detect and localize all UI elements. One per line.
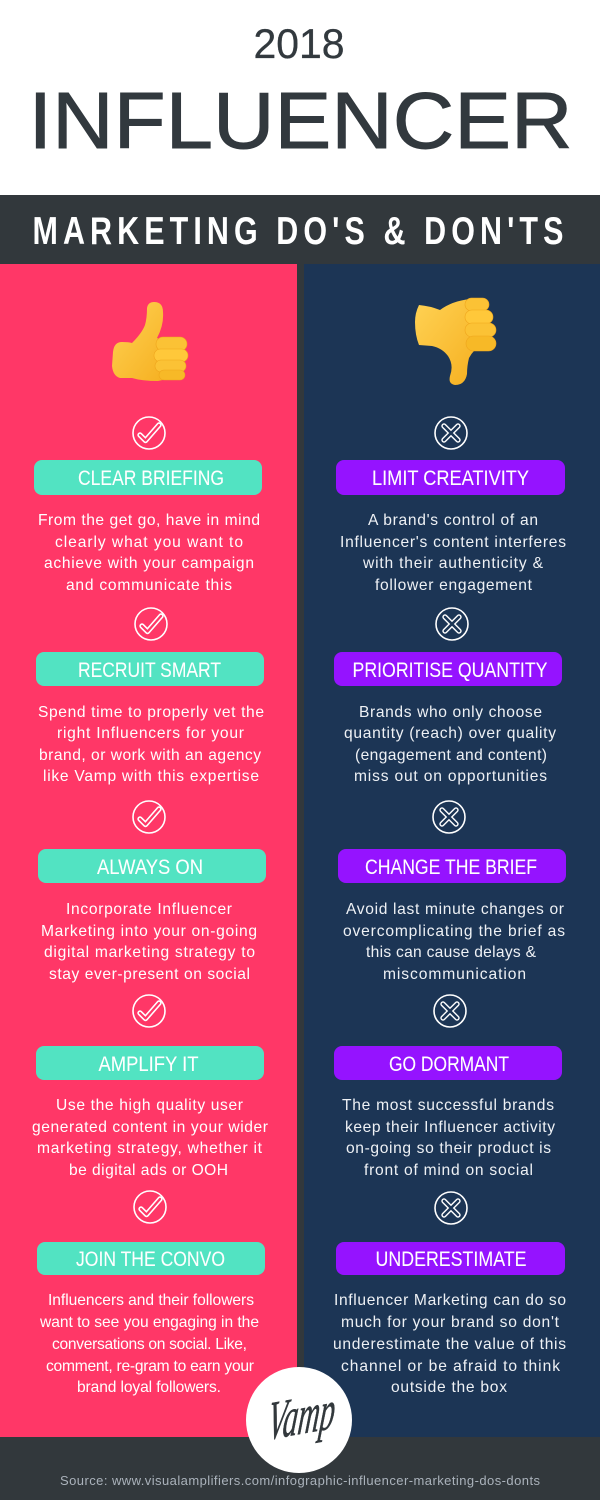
text block: underestimate: underestimate the value of this: [333, 1336, 566, 1353]
center gutter: [297, 264, 304, 1437]
badge: clear briefing: [34, 460, 262, 495]
text block: go dormant: keep their Influencer activity: [345, 1119, 555, 1136]
badge: amplify it: AMPLIFY IT: [98, 1053, 199, 1076]
icon: cross 3: [433, 801, 465, 833]
text block: change the brief: [343, 901, 565, 983]
badge: limit creativity: [336, 460, 565, 495]
panel: don'ts: [304, 264, 600, 1437]
text block: prioritise quantity: miss out on opportunities: [354, 768, 547, 785]
badge: go dormant: [334, 1046, 562, 1080]
text block: limit creativity: follower engagement: [375, 577, 533, 594]
text block: clear briefing: clearly what you want to: [55, 534, 243, 551]
text block: underestimate: outside the box: [391, 1379, 507, 1396]
text block: amplify it: generated content in your wider: [32, 1119, 268, 1136]
badge: clear briefing: CLEAR BRIEFING: [78, 467, 224, 490]
badge: recruit smart: RECRUIT SMART: [78, 659, 221, 682]
text block: underestimate: [333, 1292, 566, 1396]
text block: amplify it: Use the high quality user: [56, 1097, 243, 1114]
text block: underestimate: channel or be afraid to think: [341, 1358, 560, 1375]
title: INFLUENCER: INFLUENCER: [28, 76, 572, 165]
badge: change the brief: [338, 849, 566, 883]
icon: thumbs down: [415, 298, 496, 385]
text block: limit creativity: [340, 512, 566, 594]
title: 2018: 2018: [254, 20, 344, 67]
text block: join the convo: Influencers and their followers: [48, 1292, 254, 1309]
text block: go dormant: The most successful brands: [342, 1097, 554, 1114]
text block: always on: digital marketing strategy to: [44, 944, 255, 961]
logo: Vamp: Vamp: [265, 1378, 339, 1452]
text block: change the brief: miscommunication: [383, 966, 526, 983]
text block: change the brief: this can cause delays &: [366, 944, 537, 961]
text block: clear briefing: achieve with your campaign: [44, 555, 254, 572]
text block: recruit smart: Spend time to properly vet the: [38, 704, 264, 721]
header band: [0, 195, 600, 264]
text block: underestimate: much for your brand so don't: [341, 1314, 560, 1331]
text block: prioritise quantity: (engagement and content): [355, 747, 547, 764]
badge: always on: [38, 849, 266, 883]
text block: go dormant: on-going so their product is: [346, 1140, 551, 1157]
text block: amplify it: be digital ads or OOH: [69, 1162, 228, 1179]
text block: always on: [41, 901, 257, 983]
text block: recruit smart: right Influencers for your: [57, 725, 244, 742]
text block: prioritise quantity: quantity (reach) over quality: [344, 725, 556, 742]
text block: join the convo: [39, 1292, 259, 1396]
icon: cross 5: [435, 1192, 467, 1224]
text block: go dormant: [342, 1097, 555, 1179]
text block: amplify it: marketing strategy, whether it: [37, 1140, 263, 1157]
icon: check 2: [135, 608, 167, 640]
text block: clear briefing: and communicate this: [66, 577, 232, 594]
text block: always on: stay ever-present on social: [49, 966, 250, 983]
icon: cross 4: [434, 995, 466, 1027]
badge: recruit smart: [36, 652, 264, 686]
text block: amplify it: [32, 1097, 268, 1179]
panel: do's: [0, 264, 297, 1437]
icon: check 4: [133, 995, 165, 1027]
text block: limit creativity: with their authenticity &: [362, 555, 544, 572]
badge: join the convo: [37, 1242, 265, 1275]
badge: underestimate: [336, 1242, 565, 1275]
badge: underestimate: UNDERESTIMATE: [376, 1248, 526, 1271]
text block: clear briefing: [38, 512, 260, 594]
text block: recruit smart: like Vamp with this expertise: [43, 768, 259, 785]
text block: go dormant: front of mind on social: [364, 1162, 533, 1179]
text block: clear briefing: From the get go, have in mind: [38, 512, 260, 529]
text block: underestimate: Influencer Marketing can do so: [334, 1292, 566, 1309]
text block: change the brief: overcomplicating the brief as: [343, 923, 565, 940]
text block: join the convo: brand loyal followers.: [77, 1379, 221, 1396]
footer band: [0, 1437, 600, 1500]
text block: always on: Marketing into your on-going: [41, 923, 257, 940]
badge: limit creativity: LIMIT CREATIVITY: [372, 467, 529, 490]
icon: check 1: [133, 417, 165, 449]
text block: join the convo: want to see you engaging in the: [39, 1314, 259, 1331]
logo: Vamp: [246, 1367, 352, 1473]
icon: thumbs up: [112, 302, 188, 381]
text block: recruit smart: [38, 704, 264, 785]
text block: limit creativity: Influencer's content interferes: [340, 534, 566, 551]
icon: cross 1: [435, 417, 467, 449]
icon: cross 2: [436, 608, 468, 640]
badge: amplify it: [36, 1046, 264, 1080]
text block: change the brief: Avoid last minute changes or: [346, 901, 564, 918]
badge: change the brief: CHANGE THE BRIEF: [365, 856, 537, 879]
badge: prioritise quantity: [334, 652, 562, 686]
badge: prioritise quantity: PRIORITISE QUANTITY: [352, 659, 548, 682]
source line: Source: www.visualamplifiers.com/infographic-influencer-marketing-dos-donts: [60, 1473, 540, 1488]
text block: recruit smart: brand, or work with an agency: [39, 747, 261, 764]
text block: prioritise quantity: [344, 704, 556, 785]
badge: join the convo: JOIN THE CONVO: [76, 1248, 225, 1271]
text block: prioritise quantity: Brands who only choose: [359, 704, 542, 721]
text block: limit creativity: A brand's control of an: [368, 512, 538, 529]
badge: go dormant: GO DORMANT: [389, 1053, 509, 1076]
text block: join the convo: conversations on social. Like,: [52, 1336, 247, 1353]
icon: check 3: [133, 801, 165, 833]
icon: check 5: [134, 1191, 166, 1223]
text block: always on: Incorporate Influencer: [66, 901, 232, 918]
text block: join the convo: comment, re-gram to earn your: [46, 1358, 254, 1375]
badge: always on: ALWAYS ON: [97, 856, 203, 879]
